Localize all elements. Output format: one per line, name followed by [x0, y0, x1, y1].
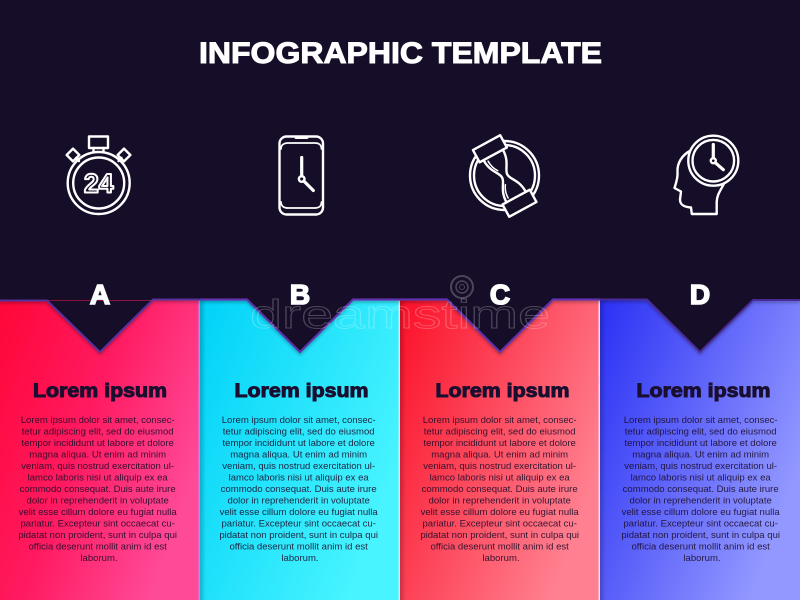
- heading: A: Lorem ipsum: [33, 380, 167, 402]
- body text: B: velit esse cillum dolore eu fugiat nulla: [220, 507, 378, 518]
- body text: D: veniam, quis nostrud exercitation ul-: [624, 461, 777, 472]
- body text: C: pidatat non proident, sunt in culpa qui: [420, 530, 579, 541]
- body text: D: velit esse cillum dolore eu fugiat nulla: [622, 507, 780, 518]
- panel: B: [200, 279, 400, 600]
- body text: B: veniam, quis nostrud exercitation ul-: [222, 461, 375, 472]
- body text: D: officia deserunt mollit anim id est: [632, 542, 770, 552]
- icon: stopwatch 24: [67, 136, 130, 214]
- body text: C: laborum.: [482, 553, 520, 564]
- body text: B: pidatat non proident, sunt in culpa qui: [219, 530, 378, 541]
- watermark: [250, 276, 550, 337]
- body text: C: magna aliqua. Ut enim ad minim: [431, 450, 568, 460]
- notch border: C: [400, 300, 600, 352]
- body text: D: pariatur. Excepteur sint occaecat cu-: [623, 518, 778, 530]
- body text: B: tetur adipiscing elit, sed do eiusmod: [223, 426, 375, 438]
- letter: A: A: [90, 279, 110, 310]
- body text: B: commodo consequat. Duis aute irure: [221, 484, 377, 495]
- body text: D: commodo consequat. Duis aute irure: [623, 484, 779, 495]
- body text: A: dolor in reprehenderit in voluptate: [27, 496, 169, 506]
- body text: A: pidatat non proident, sunt in culpa qui: [18, 530, 177, 541]
- body text: D: laborum.: [683, 553, 721, 564]
- body text: D: magna aliqua. Ut enim ad minim: [632, 450, 769, 460]
- title: INFOGRAPHIC TEMPLATE: [199, 37, 602, 70]
- body text: D: dolor in reprehenderit in voluptate: [630, 496, 772, 506]
- body text: A: velit esse cillum dolore eu fugiat nulla: [19, 507, 177, 518]
- body text: A: magna aliqua. Ut enim ad minim: [29, 450, 166, 460]
- notch border: B: [200, 300, 400, 352]
- body text: A: lamco laboris nisi ut aliquip ex ea: [28, 472, 168, 484]
- body text: A: commodo consequat. Duis aute irure: [20, 484, 176, 495]
- icon: head with clock: [674, 136, 738, 214]
- body text: B: lamco laboris nisi ut aliquip ex ea: [229, 472, 369, 484]
- body text: D: Lorem ipsum dolor sit amet, consec-: [624, 415, 778, 426]
- panel: C: [400, 279, 600, 600]
- body text: B: officia deserunt mollit anim id est: [230, 542, 368, 552]
- notch: B: [247, 300, 353, 352]
- body text: A: laborum.: [80, 553, 118, 564]
- body text: C: velit esse cillum dolore eu fugiat nulla: [421, 507, 579, 518]
- notch: C: [447, 300, 553, 352]
- letter: D: D: [690, 279, 710, 310]
- icon: stopwatch 24: 24: [84, 168, 114, 198]
- icon: phone with clock: [280, 136, 323, 214]
- panel: A: [0, 279, 200, 600]
- body text: B: magna aliqua. Ut enim ad minim: [230, 450, 367, 460]
- body text: C: commodo consequat. Duis aute irure: [422, 484, 578, 495]
- body text: A: officia deserunt mollit anim id est: [29, 542, 167, 552]
- body text: C: dolor in reprehenderit in voluptate: [429, 496, 571, 506]
- heading: D: Lorem ipsum: [636, 380, 770, 402]
- heading: C: Lorem ipsum: [436, 380, 570, 402]
- body text: B: laborum.: [281, 553, 319, 564]
- body text: C: veniam, quis nostrud exercitation ul-: [423, 461, 576, 472]
- letter: B: B: [290, 279, 310, 310]
- icon: hourglass in circle: [470, 135, 539, 217]
- letter: C: C: [490, 279, 510, 310]
- body text: C: tetur adipiscing elit, sed do eiusmod: [424, 426, 576, 438]
- notch border: A: [0, 300, 200, 352]
- notch border: D: [600, 300, 800, 352]
- heading: B: Lorem ipsum: [234, 380, 368, 402]
- body text: D: tempor incididunt ut labore et dolore: [625, 438, 777, 449]
- body text: C: officia deserunt mollit anim id est: [431, 542, 569, 552]
- notch: D: [647, 300, 753, 352]
- notch: A: [47, 300, 153, 352]
- watermark: dreamstime: [250, 293, 550, 337]
- body text: A: pariatur. Excepteur sint occaecat cu-: [20, 518, 175, 530]
- body text: A: Lorem ipsum dolor sit amet, consec-: [21, 415, 175, 426]
- body text: B: Lorem ipsum dolor sit amet, consec-: [222, 415, 376, 426]
- body text: B: tempor incididunt ut labore et dolore: [223, 438, 375, 449]
- body text: B: pariatur. Excepteur sint occaecat cu-: [221, 518, 376, 530]
- body text: C: Lorem ipsum dolor sit amet, consec-: [423, 415, 577, 426]
- body text: C: lamco laboris nisi ut aliquip ex ea: [430, 472, 570, 484]
- body text: C: pariatur. Excepteur sint occaecat cu-: [422, 518, 577, 530]
- body text: D: tetur adipiscing elit, sed do eiusmod: [625, 426, 777, 438]
- body text: A: tetur adipiscing elit, sed do eiusmod: [22, 426, 174, 438]
- body text: D: pidatat non proident, sunt in culpa qui: [621, 530, 780, 541]
- body text: D: lamco laboris nisi ut aliquip ex ea: [631, 472, 771, 484]
- panel: D: [600, 279, 800, 600]
- body text: A: tempor incididunt ut labore et dolore: [22, 438, 174, 449]
- body text: C: tempor incididunt ut labore et dolore: [424, 438, 576, 449]
- body text: A: veniam, quis nostrud exercitation ul-: [21, 461, 174, 472]
- body text: B: dolor in reprehenderit in voluptate: [228, 496, 370, 506]
